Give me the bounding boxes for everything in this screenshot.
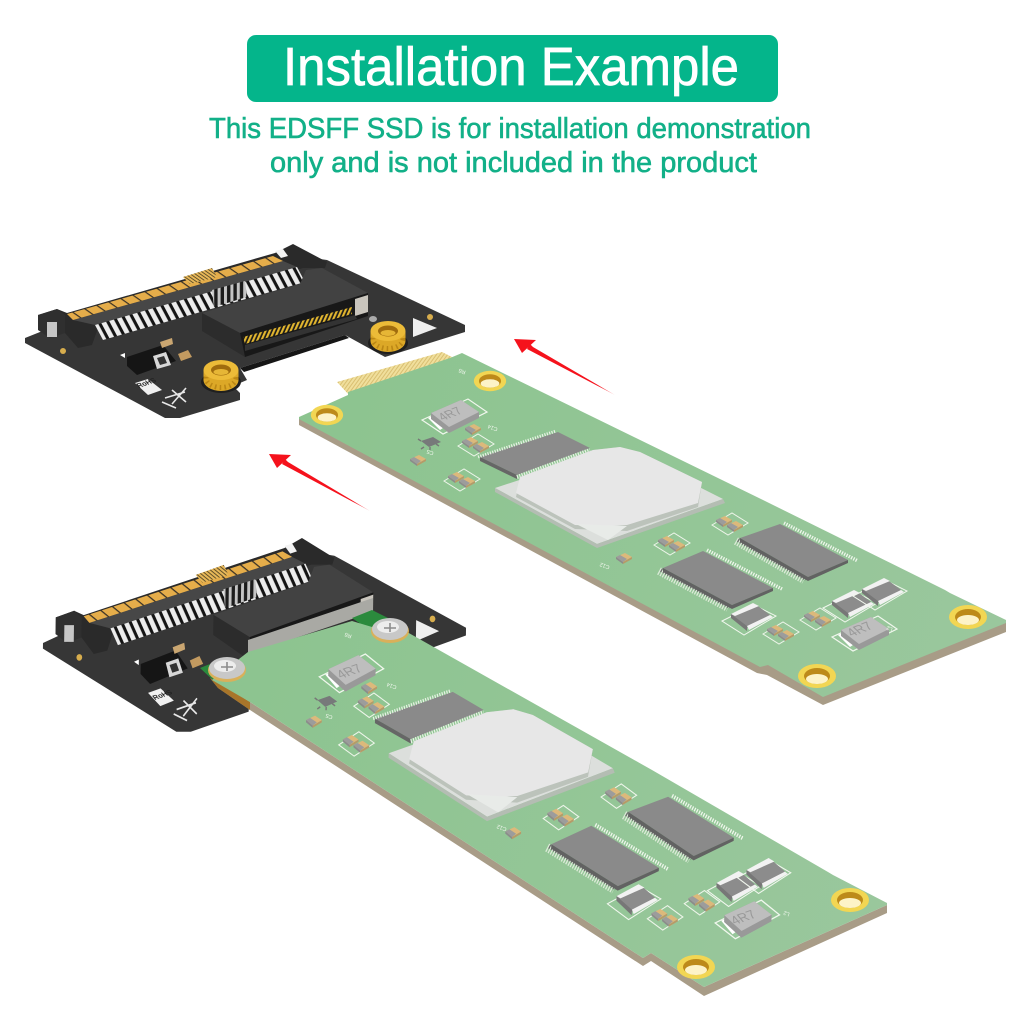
silkscreen labels: C5 [426,448,435,456]
silkscreen labels: C12 [599,561,611,570]
subtitle note: only and is not included in the product [270,147,757,179]
board edge thickness [210,678,887,996]
mounting hole top [474,371,506,391]
mounting hole bottom [677,955,715,979]
silkscreen labels: L2 [886,624,894,632]
gold finger connector [337,352,462,396]
silkscreen labels [325,631,791,917]
assembled board components [299,653,798,939]
brass standoff left [201,360,241,393]
arrow upper [514,339,615,395]
silkscreen labels [426,367,894,632]
inserted slot lit band [248,598,373,654]
subtitle note [209,113,811,179]
exposed dark green pads [352,610,392,632]
title banner [247,35,778,102]
arrow lower [269,454,370,511]
top adapter board [25,244,465,418]
silkscreen labels: C14 [386,681,398,690]
mounting hole bottom [798,664,836,688]
rohs label text: RoHS [134,376,158,390]
silkscreen labels: C12 [496,823,508,832]
screw right [371,618,409,643]
mounting hole right [949,605,987,629]
bottom adapter board [42,538,467,732]
rohs label text: RoHS [150,688,174,702]
silkscreen labels: L2 [783,909,791,917]
inductor marking right: 4R7 [843,619,876,639]
brass standoff right [368,321,408,354]
top SSD board [299,352,1006,705]
inductor marking right: 4R7 [727,907,759,927]
subtitle note: This EDSFF SSD is for installation demonstration [209,113,811,145]
title text: Installation Example [283,37,739,97]
screw left [208,657,246,682]
small silver nut [369,316,377,322]
mounting hole right [831,888,869,912]
assembled SSD board [200,610,887,996]
silkscreen labels: C5 [325,712,334,720]
board edge thickness [299,417,1006,705]
green board surface [299,353,1006,697]
mounting hole left [311,405,343,425]
silkscreen labels: R6 [344,631,353,639]
inductor marking left: 4R7 [333,661,365,681]
inductor marking left: 4R7 [435,405,466,423]
silkscreen labels: C14 [487,423,499,432]
board components [410,399,907,651]
green board surface [212,621,887,987]
silkscreen labels: R6 [458,367,467,375]
